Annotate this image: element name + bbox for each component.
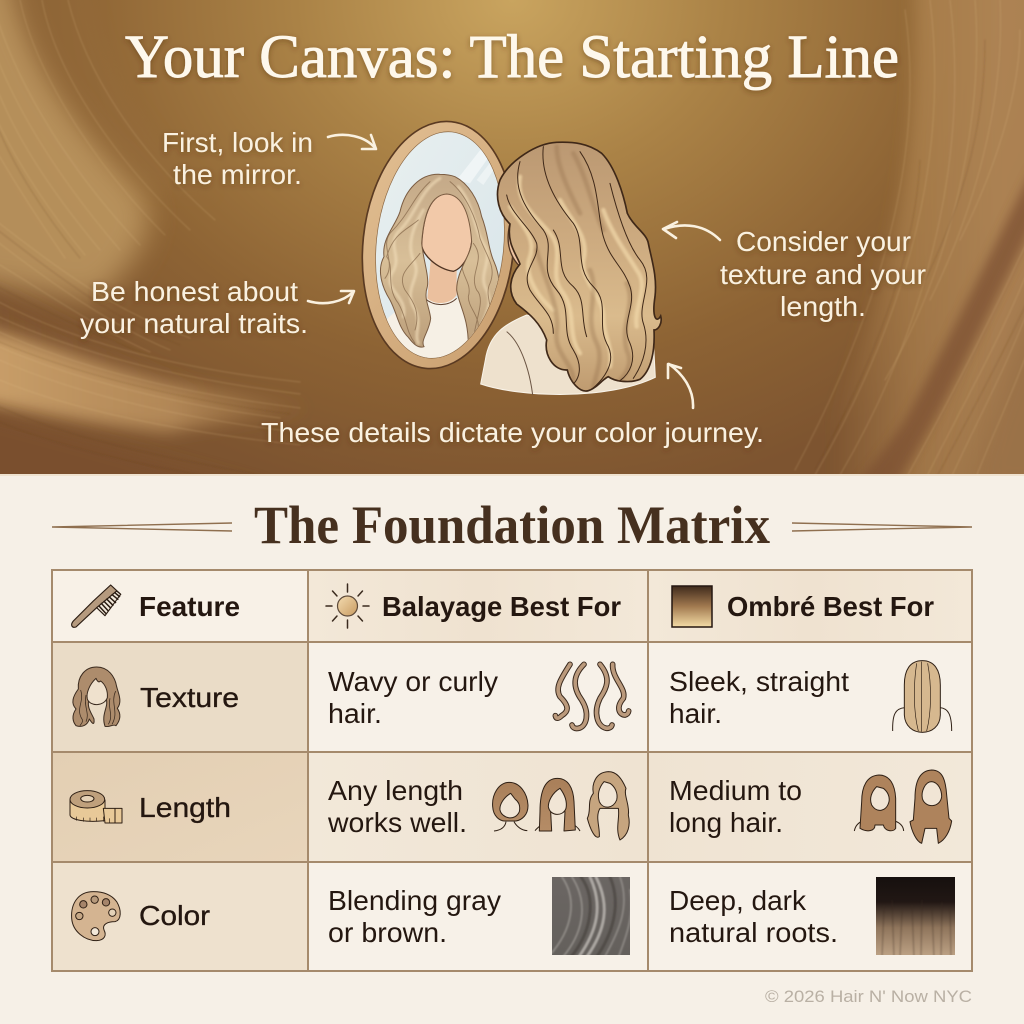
icon: wavy hair head: [73, 667, 120, 727]
cell: balayage length: works well.: [327, 807, 467, 838]
cell: ombre length: long hair.: [669, 807, 783, 838]
icon: sleek straight hair back view: [893, 661, 952, 732]
callout: first look in the mirror: [162, 127, 313, 190]
header: ombre best for: Ombré Best For: [727, 591, 934, 622]
cell: ombre texture: hair.: [669, 698, 722, 729]
cell: ombre length: [669, 770, 952, 843]
table cell fills: [52, 570, 972, 971]
header: feature: [72, 585, 240, 627]
header: ombre best for: [672, 586, 934, 627]
cell: ombre color: natural roots.: [669, 917, 838, 948]
heading: the foundation matrix: The Foundation Matrix: [254, 495, 770, 555]
cell: balayage texture: Wavy or curly: [328, 666, 498, 697]
mirror glass with reflection: [376, 132, 504, 358]
row: length: [70, 791, 231, 823]
callout: consider your texture and length: texture and your: [720, 259, 926, 290]
cell: ombre texture: [669, 661, 952, 732]
illustration: woman looking in mirror: [350, 114, 661, 395]
cell: balayage texture: [328, 664, 629, 729]
row: color: [72, 892, 210, 941]
cell: ombre color: [669, 877, 955, 958]
row: color: Color: [139, 900, 210, 931]
comparison table: [52, 570, 972, 971]
icon: tape measure: [70, 791, 122, 823]
footer copyright: © 2026 Hair N' Now NYC: [765, 987, 972, 1006]
cell: balayage color: [328, 877, 631, 958]
cell: balayage color: or brown.: [328, 917, 447, 948]
icon: curly locks: [555, 664, 629, 729]
callout: consider your texture and length: Consider your: [736, 226, 911, 257]
foreground woman hair: [497, 142, 661, 391]
panel: hero background: [0, 0, 1024, 500]
arrow: to hair length: [668, 364, 693, 408]
icon: sun: [326, 584, 369, 628]
arrow: to hair texture: [663, 222, 720, 240]
icon: short, medium, long hair heads: [493, 772, 629, 840]
cell: ombre texture: Sleek, straight: [669, 666, 849, 697]
decorative strands: [0, 0, 1024, 480]
cell: ombre length: Medium to: [669, 775, 802, 806]
row: texture: Texture: [140, 682, 239, 713]
swatch: gray hair: [550, 877, 631, 958]
callout: consider your texture and length: length.: [780, 291, 866, 322]
callout: first look in the mirror: the mirror.: [173, 159, 302, 190]
callout: details dictate colour journey: These details dictate your color journey.: [261, 417, 764, 448]
row: texture: [73, 667, 239, 727]
mirror frame: [350, 114, 526, 376]
cell: ombre color: Deep, dark: [669, 885, 807, 916]
icon: palette: [72, 892, 120, 941]
icon: ombre swatch: [672, 586, 712, 627]
callout: be honest about your natural traits: [80, 276, 308, 339]
arrow: to mirror top: [328, 135, 376, 149]
header: balayage best for: [326, 584, 621, 628]
cell: balayage length: Any length: [328, 775, 463, 806]
row: length: Length: [139, 792, 231, 823]
cell: balayage color: Blending gray: [328, 885, 501, 916]
header: balayage best for: Balayage Best For: [382, 591, 621, 622]
heading: the foundation matrix: [52, 495, 972, 555]
cell: balayage texture: hair.: [328, 698, 382, 729]
callout: be honest about your natural traits: your natural traits.: [80, 308, 308, 339]
icon: comb: [72, 585, 121, 627]
arrow: to mirror side: [308, 291, 354, 303]
callout: first look in the mirror: First, look in: [162, 127, 313, 158]
title: Your Canvas: The Starting Line: [125, 24, 899, 91]
swatch: dark roots: [876, 877, 955, 958]
callout: consider your texture and length: [720, 226, 926, 322]
hero divider and lower panel: [0, 474, 1024, 1024]
cell: balayage length: [327, 772, 629, 840]
header: feature: Feature: [139, 591, 240, 622]
icon: medium and long hair heads: [854, 770, 952, 843]
callout: be honest about your natural traits: Be honest about: [91, 276, 298, 307]
foreground woman cheek and shirt: [481, 223, 655, 395]
